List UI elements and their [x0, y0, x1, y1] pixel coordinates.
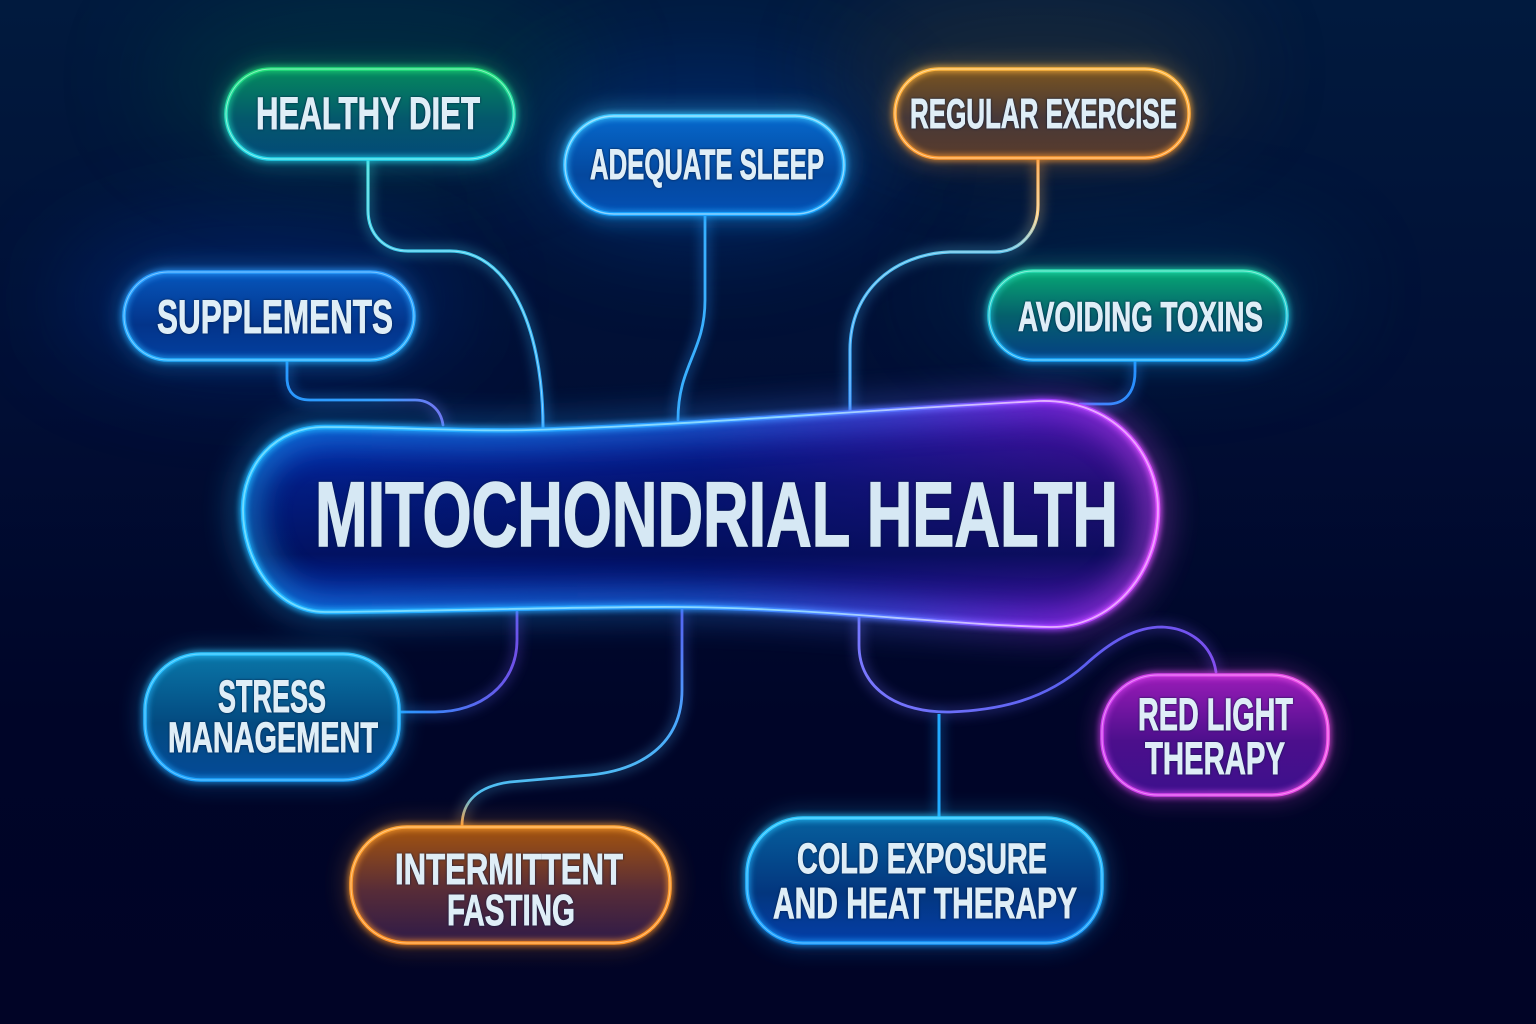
node: intermittent fasting — [351, 827, 670, 943]
connector: red light therapy to center — [859, 616, 1216, 712]
node: cold exposure and heat therapy — [747, 818, 1102, 943]
label: cold exposure and heat therapy: COLD EXPOSURE — [797, 835, 1047, 883]
label: stress management: STRESS — [218, 671, 326, 722]
label: cold exposure and heat therapy: AND HEAT THERAPY — [773, 879, 1077, 928]
label: intermittent fasting: INTERMITTENT — [395, 845, 623, 894]
node: stress management — [145, 654, 399, 780]
connector: cold exposure to center — [936, 714, 942, 818]
label: cold exposure and heat therapy — [773, 835, 1077, 928]
connector: intermittent fasting to center — [462, 610, 682, 826]
connector: healthy diet to center — [368, 159, 543, 428]
label: stress management — [168, 671, 378, 762]
label: avoiding toxins: AVOIDING TOXINS — [1018, 293, 1263, 340]
panel: central node — [243, 401, 1158, 627]
node: red light therapy — [1102, 675, 1328, 795]
node: healthy diet — [226, 69, 514, 159]
node: adequate sleep — [565, 116, 844, 214]
label: intermittent fasting — [395, 845, 623, 935]
label: stress management: MANAGEMENT — [168, 714, 378, 762]
connector: adequate sleep to center — [678, 214, 705, 420]
node: avoiding toxins — [989, 271, 1287, 360]
connector: regular exercise to center — [850, 158, 1038, 412]
label: red light therapy — [1138, 689, 1293, 784]
label: healthy diet: HEALTHY DIET — [256, 88, 480, 139]
label: intermittent fasting: FASTING — [447, 886, 575, 935]
label: regular exercise: REGULAR EXERCISE — [910, 90, 1177, 137]
title: MITOCHONDRIAL HEALTH — [315, 464, 1118, 566]
label: supplements: SUPPLEMENTS — [157, 290, 393, 343]
label: red light therapy: RED LIGHT — [1138, 689, 1293, 740]
connector: avoiding toxins to center — [1080, 360, 1135, 404]
connector: stress management to center — [400, 612, 517, 712]
node: regular exercise — [895, 69, 1189, 158]
connector: supplements to center — [287, 360, 443, 425]
node: supplements — [124, 272, 414, 360]
label: adequate sleep: ADEQUATE SLEEP — [590, 141, 824, 189]
label: red light therapy: THERAPY — [1145, 733, 1285, 784]
